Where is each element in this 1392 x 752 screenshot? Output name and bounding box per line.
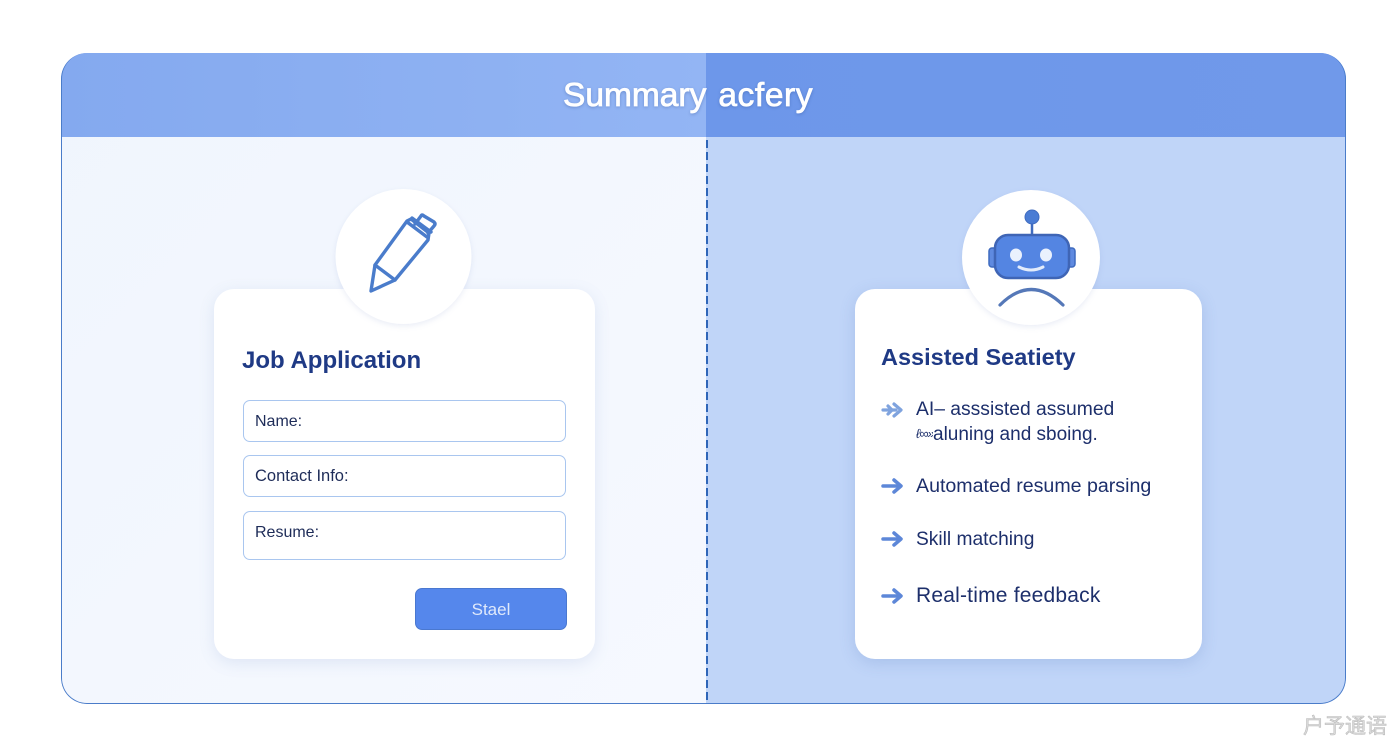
heading: job application: Job Application: [242, 347, 421, 374]
card: job application: [214, 289, 595, 659]
list item 4: Real-time feedback: [916, 584, 1101, 607]
button: submit: [415, 588, 567, 630]
list item 3: Skill matching: [916, 529, 1034, 550]
panel outline: [61, 53, 1346, 704]
title: Summary acfery: [563, 77, 813, 114]
arrow: list 1: [881, 402, 903, 418]
watermark: 户予通语: [1303, 715, 1387, 738]
form field: resume: Resume:: [255, 524, 319, 541]
list item 1: AI– asssisted assumed: [916, 399, 1114, 420]
heading: assisted: Assisted Seatiety: [881, 344, 1076, 370]
list item 2: Automated resume parsing: [916, 475, 1151, 497]
form field: name: Name:: [255, 413, 302, 430]
form field: resume: [243, 511, 566, 560]
arrow: list 4: [881, 588, 903, 604]
form field: contact info: [243, 455, 566, 497]
centre dashed divider: [706, 140, 708, 700]
panel: left background: [61, 53, 706, 704]
icon: robot: [962, 190, 1100, 328]
main panel: [61, 53, 1346, 704]
header: right half: [706, 53, 1346, 137]
panel: right background: [706, 53, 1346, 704]
button: submit: Stael: [472, 600, 510, 619]
header: left half: [61, 53, 706, 137]
icon: pencil: [335, 189, 472, 326]
list item 1 line 2: aluning and sboing.: [933, 424, 1098, 445]
arrow: list 2: [881, 478, 903, 494]
form field: name: [243, 400, 566, 442]
card: assisted: [855, 289, 1202, 659]
form field: contact info: Contact Info:: [255, 467, 349, 485]
arrow: list 3: [881, 531, 903, 547]
